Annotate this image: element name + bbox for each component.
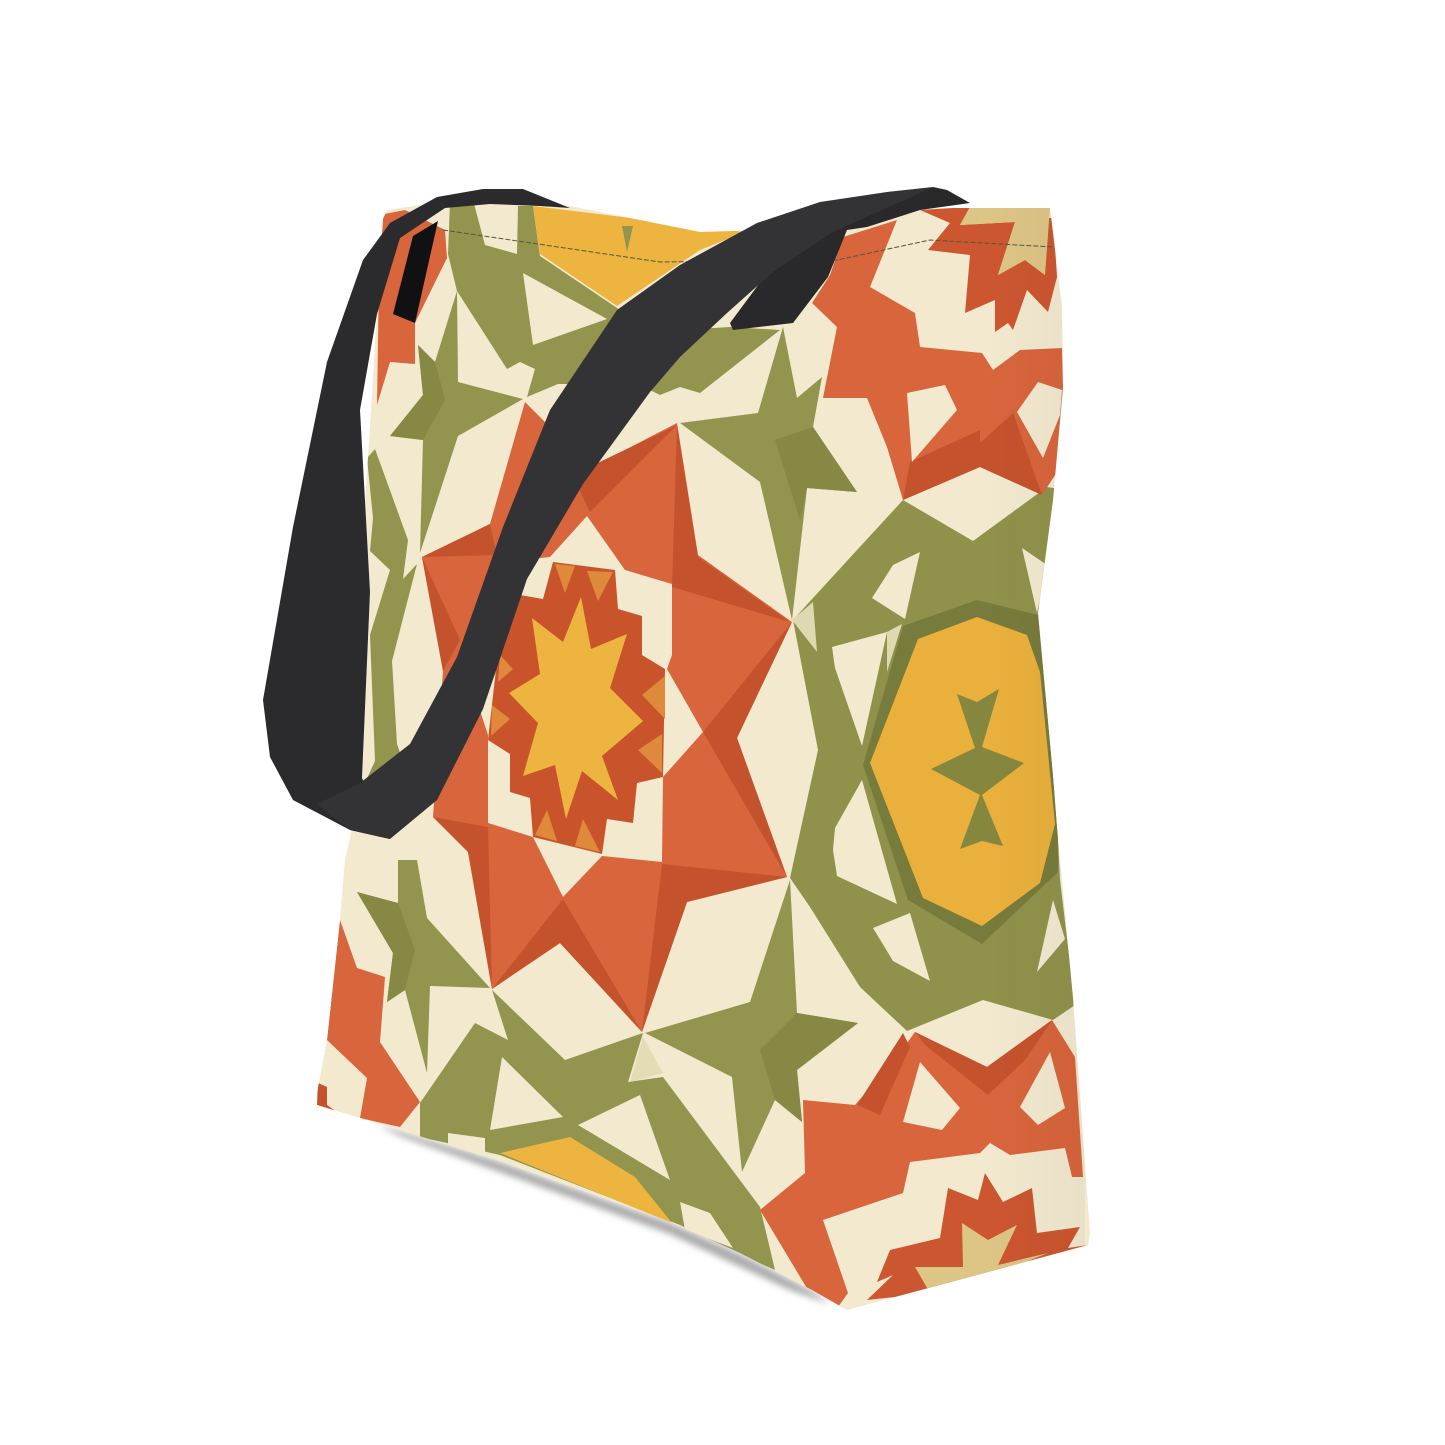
yellow star [509, 597, 643, 819]
yellow panel: bottom [500, 1137, 672, 1223]
olive star: upper right [680, 327, 857, 620]
pale shards [792, 602, 902, 672]
olive band: left edge [368, 449, 417, 777]
rosette centre: bottom right [915, 1223, 1048, 1293]
rosette: bottom right [867, 1173, 1088, 1300]
darker facets: bottom right [857, 1020, 1052, 1115]
olive star facet: lower right [760, 1013, 858, 1122]
rosette centre: top right [960, 207, 1050, 275]
olive star facet: upper left [390, 345, 445, 440]
openings: bottom right motif [903, 1052, 1065, 1130]
olive bottom band [420, 990, 775, 1270]
orange corner: bottom left [317, 1083, 335, 1110]
strap tab: left [393, 221, 438, 323]
large orange star [422, 402, 792, 1032]
olive medallion motif [931, 689, 1024, 849]
handles [263, 187, 970, 839]
rosette orange triangles [491, 564, 665, 852]
olive star: lower right [645, 880, 858, 1172]
yellow panel: top [533, 206, 745, 306]
ground shadow [377, 1124, 830, 1304]
orange motif: top right [812, 220, 1065, 500]
gusset fold shading [985, 200, 1085, 1320]
rosette: top right [920, 207, 1057, 332]
orange motif: bottom right [760, 1020, 1083, 1307]
olive star: upper left [390, 291, 523, 553]
strap tab: right [730, 187, 970, 330]
pale shard [630, 1037, 663, 1082]
back strap [263, 189, 570, 839]
small olive point in top yellow panel [622, 226, 633, 252]
darker facets of star [422, 425, 792, 1032]
olive star: lower left [357, 860, 490, 1073]
darker facets: top right [903, 413, 1042, 500]
cream ring inside star [470, 516, 703, 897]
top cream triangle [523, 273, 607, 345]
olive medallion field [790, 487, 1075, 1031]
olive star facet: lower left [357, 892, 415, 1002]
yellow medallion [870, 617, 1055, 926]
orange motif: bottom left [327, 920, 420, 1127]
dark olive ring [863, 600, 1058, 944]
central rosette [488, 562, 665, 854]
olive band: under strap [651, 327, 780, 395]
medallion openings [832, 548, 1065, 981]
front strap [317, 187, 933, 839]
top stitching [443, 230, 1053, 262]
olive star facet: upper right [775, 427, 857, 520]
openings: top right motif [907, 382, 1062, 462]
bag body [300, 190, 1100, 1330]
cream fabric [300, 190, 1100, 1330]
bottom cream openings [448, 1057, 733, 1248]
rosette red body [488, 562, 665, 854]
top olive band [448, 200, 620, 397]
tote bag illustration [263, 187, 1090, 1310]
orange motif: top left [377, 210, 447, 405]
